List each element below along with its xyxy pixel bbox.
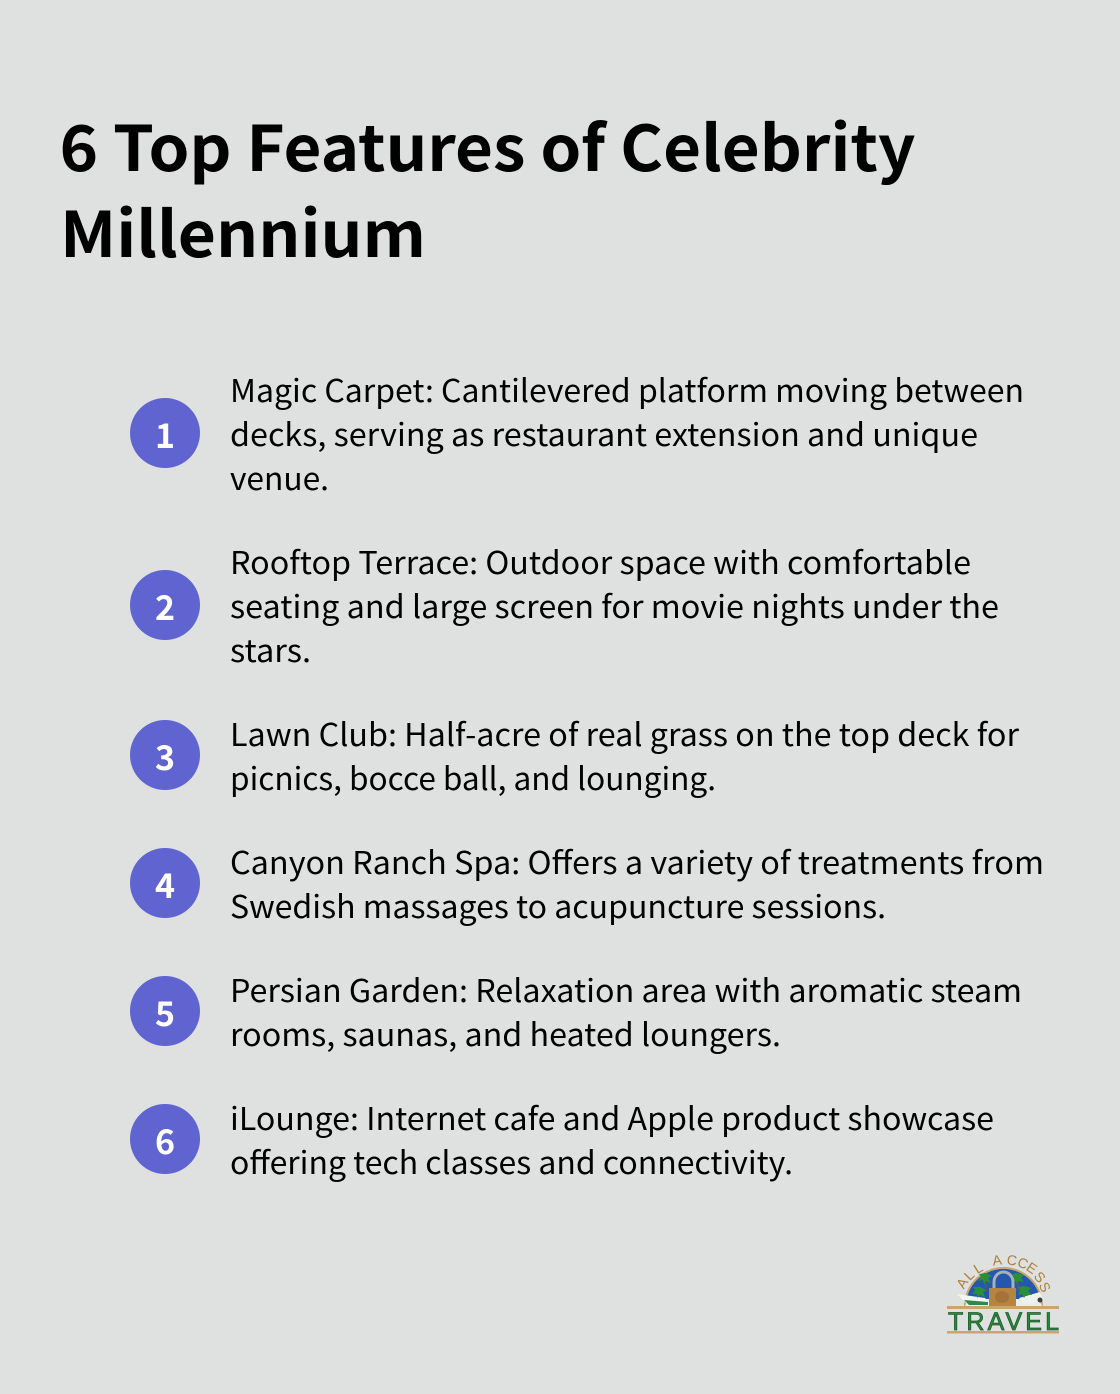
text: Lawn Club: picnics, bocce ball, and lounging. [230,754,716,800]
logo arc lettering: E [1024,1259,1040,1277]
list item 4: Canyon Ranch Spa [130,838,1044,928]
text: Lawn Club: Lawn Club: Half-acre of real grass on the top deck for [230,710,1020,756]
number badge 2 [130,570,200,640]
text: Magic Carpet [230,366,1024,500]
number badge 6: 6 [155,1115,175,1164]
text: Magic Carpet: Magic Carpet: Cantilevered platform moving between [230,366,1024,412]
text: Persian Garden: Persian Garden: Relaxation area with aromatic steam [230,966,1022,1012]
number badge 6 [130,1104,200,1174]
text: Canyon Ranch Spa: Canyon Ranch Spa: Offers a variety of treatments from [230,838,1044,884]
logo arc lettering: L [970,1259,986,1277]
number badge 3: 3 [155,731,175,780]
text: Lawn Club [230,710,1020,800]
logo boats [957,1292,1044,1305]
text: Persian Garden [230,966,1022,1056]
logo arc lettering: S [1031,1268,1049,1286]
text: iLounge: offering tech classes and connectivity. [230,1138,793,1184]
title: 6 Top Features of Celebrity [60,99,915,190]
number badge 5 [130,976,200,1046]
logo arc lettering [953,1251,1054,1295]
list item 1: Magic Carpet [130,366,1024,500]
number badge 3 [130,720,200,790]
logo wordmark: TRAVEL [948,1308,1059,1336]
number badge 1: 1 [155,409,175,458]
title: Millennium [60,185,426,276]
logo: All Access Travel [947,1251,1059,1336]
list item 6: iLounge [130,1094,994,1184]
text: Rooftop Terrace: stars. [230,626,311,672]
logo palms [972,1273,1032,1298]
text: Magic Carpet: decks, serving as restaurant extension and unique [230,410,978,456]
number badge 4: 4 [155,859,175,908]
text: Rooftop Terrace: seating and large screen for movie nights under the [230,582,999,628]
text: Rooftop Terrace [230,538,999,672]
logo arc lettering: A [953,1274,972,1291]
list item 3: Lawn Club [130,710,1020,800]
logo arc lettering: C [1015,1254,1031,1272]
number badge 4 [130,848,200,918]
text: Persian Garden: rooms, saunas, and heated loungers. [230,1010,781,1056]
logo arc lettering: S [1036,1279,1054,1295]
logo dome [964,1267,1043,1306]
text: iLounge: iLounge: Internet cafe and Apple product showcase [230,1094,994,1140]
text: Canyon Ranch Spa: Swedish massages to acupuncture sessions. [230,882,886,928]
logo rules [947,1306,1059,1334]
logo arc lettering: A [991,1251,1003,1269]
text: Rooftop Terrace: Rooftop Terrace: Outdoor space with comfortable [230,538,971,584]
number badge 2: 2 [155,581,175,630]
list item 2: Rooftop Terrace [130,538,999,672]
title [60,99,915,276]
text: Canyon Ranch Spa [230,838,1044,928]
logo arc lettering: C [1006,1251,1018,1269]
list item 5: Persian Garden [130,966,1022,1056]
logo padlock [989,1272,1016,1306]
text: iLounge [230,1094,994,1184]
number badge 5: 5 [155,987,175,1036]
number badge 1 [130,398,200,468]
text: Magic Carpet: venue. [230,454,329,500]
logo arc lettering: L [961,1266,978,1283]
